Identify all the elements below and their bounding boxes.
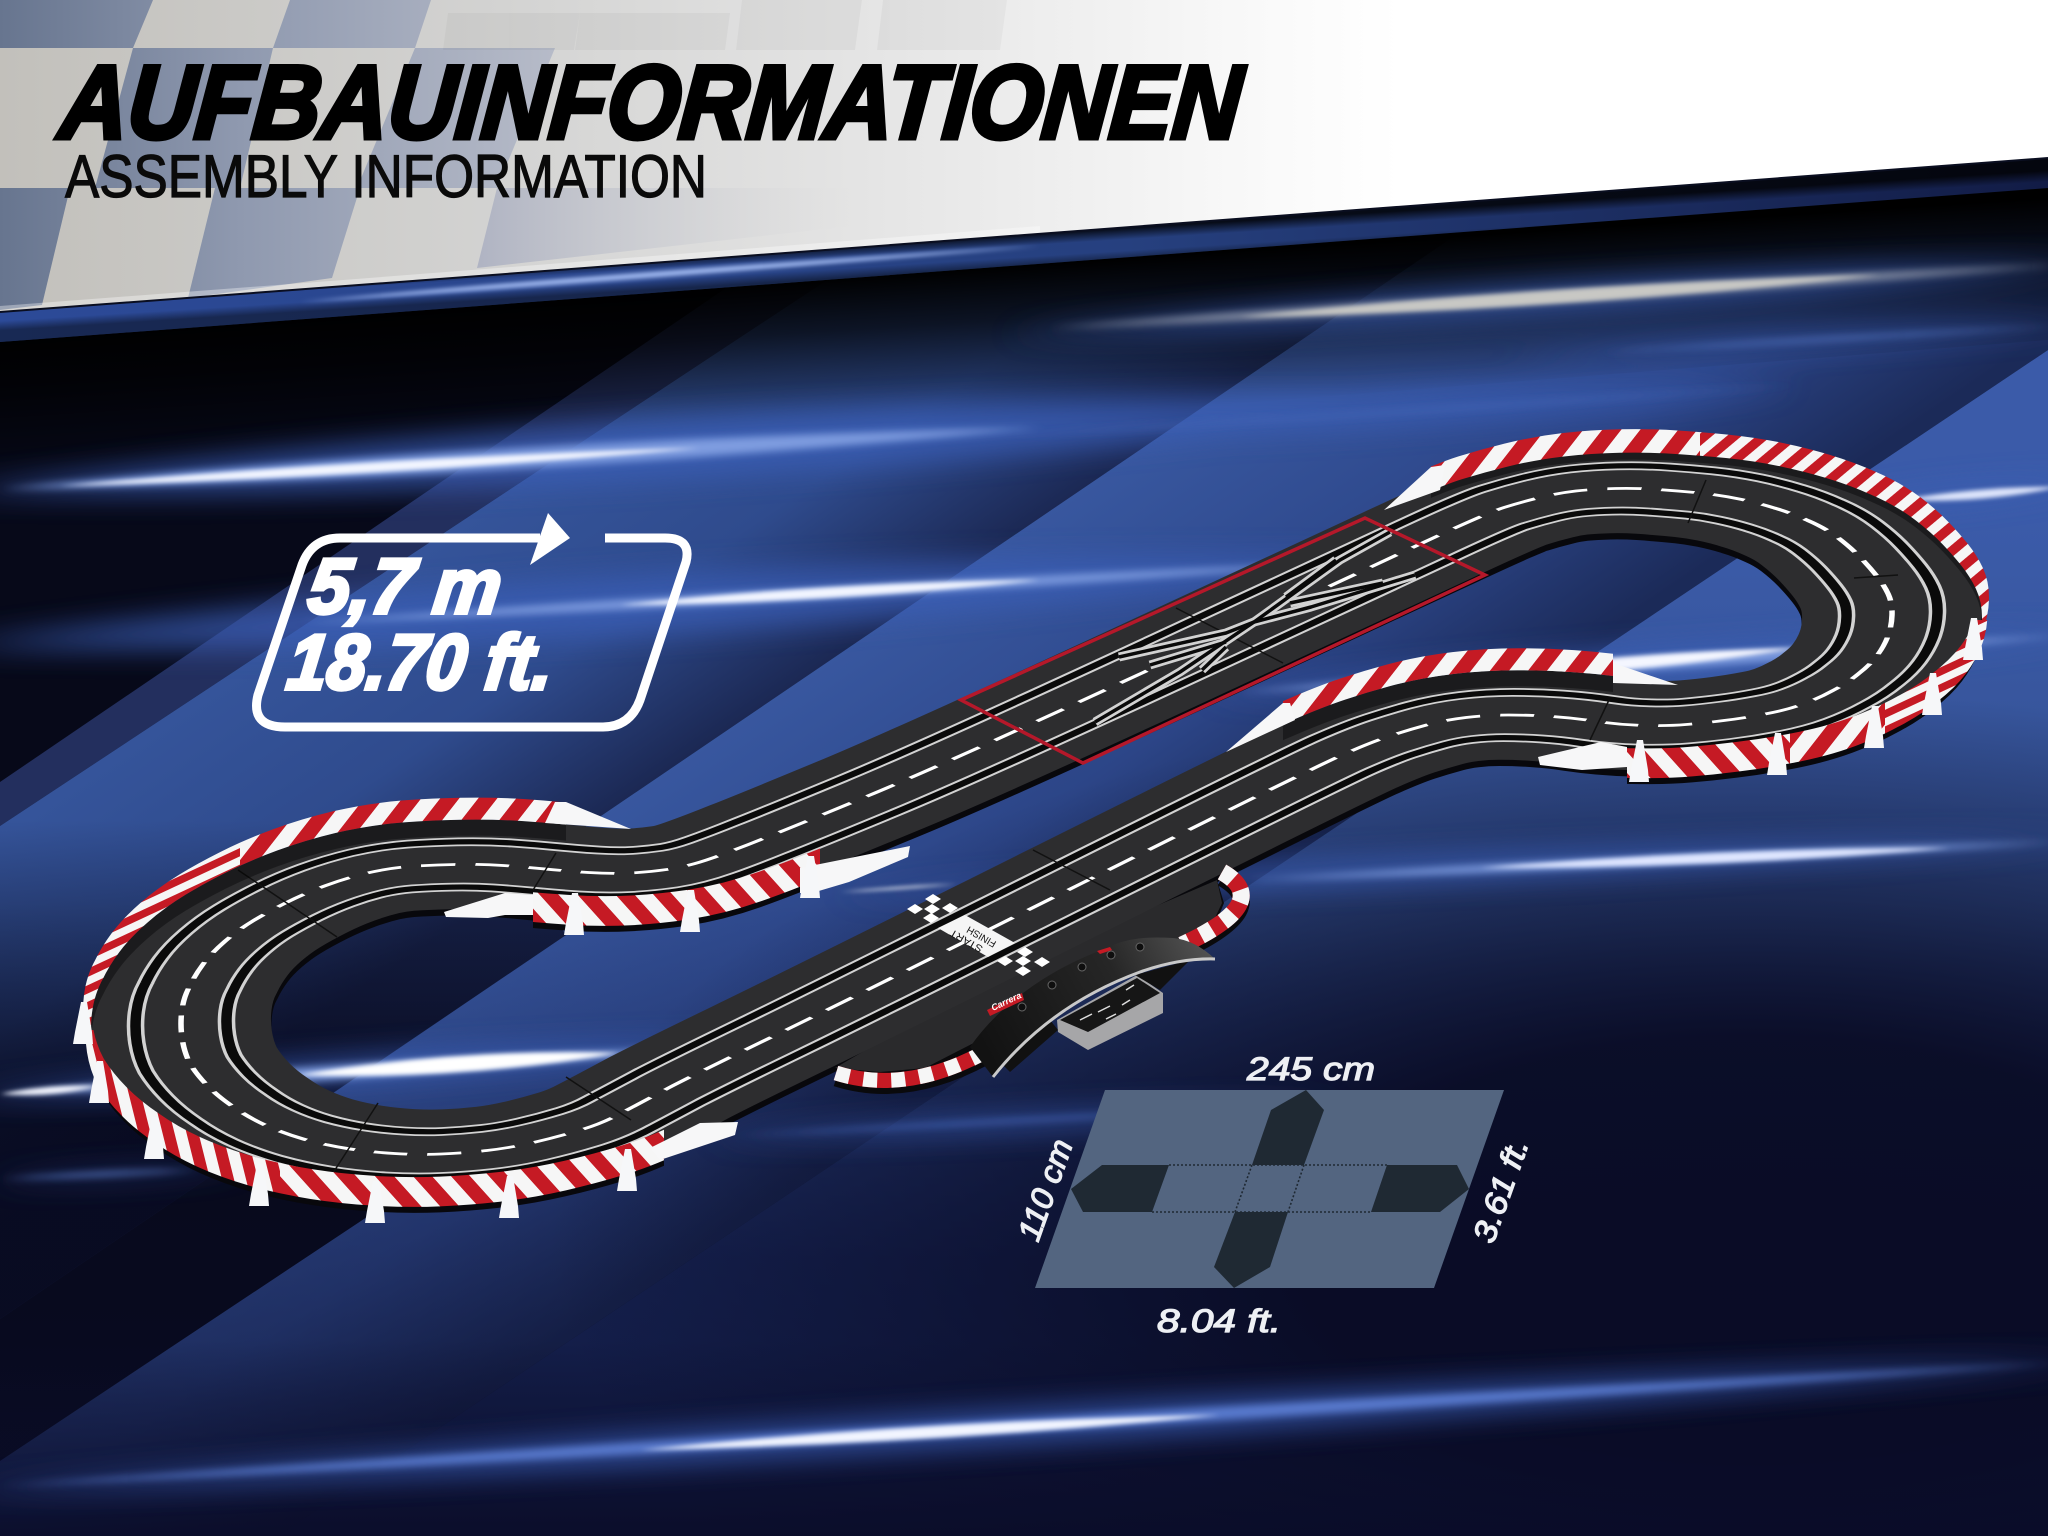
- barrier posts: [73, 618, 1983, 1223]
- footprint diagram: [1011, 1051, 1536, 1339]
- race track: [73, 429, 1989, 1223]
- length in metres: 5,7 m: [304, 542, 507, 630]
- callout: track length: [257, 513, 687, 727]
- title: AUFBAUINFORMATIONEN: [53, 45, 1249, 161]
- start and finish marking: [907, 894, 1050, 976]
- left kerb: [836, 1052, 985, 1086]
- track base shadow: [153, 494, 1918, 1167]
- width label cm: 245 cm: [1246, 1051, 1375, 1087]
- red crossover outline: [961, 518, 1485, 763]
- white barrier end wedges: [444, 465, 1678, 1160]
- red and white barriers: [83, 429, 1989, 1207]
- barrier shading on track: [91, 452, 1982, 1030]
- asphalt and rails: [153, 488, 1918, 1154]
- depth label ft: 3.61 ft.: [1466, 1134, 1536, 1247]
- control arch: Carrera: [990, 990, 1023, 1013]
- crossover section: [1095, 532, 1415, 722]
- subtitle: ASSEMBLY INFORMATION: [65, 143, 707, 210]
- kerb shoulders: [835, 880, 1224, 1082]
- track cross shape: [1071, 1090, 1469, 1288]
- right kerb: [1182, 872, 1241, 951]
- header banner with checker flag: [0, 0, 2048, 312]
- checker marks: [907, 894, 1050, 976]
- depth label cm: 110 cm: [1011, 1134, 1080, 1245]
- digital control unit: [1000, 960, 1190, 1072]
- width label ft: 8.04 ft.: [1157, 1303, 1281, 1339]
- light streaks: [0, 265, 2048, 1486]
- header strip: blue band: [0, 158, 2048, 342]
- footprint area: [1035, 1090, 1504, 1288]
- length in feet: 18.70 ft.: [283, 618, 559, 706]
- callout frame with arrow: [257, 513, 687, 727]
- control arch: [970, 937, 1215, 1077]
- start and finish marking: START: [948, 926, 985, 954]
- start and finish marking: FINISH: [965, 923, 998, 949]
- track joints: [238, 480, 1898, 1173]
- checker squares: [0, 0, 555, 310]
